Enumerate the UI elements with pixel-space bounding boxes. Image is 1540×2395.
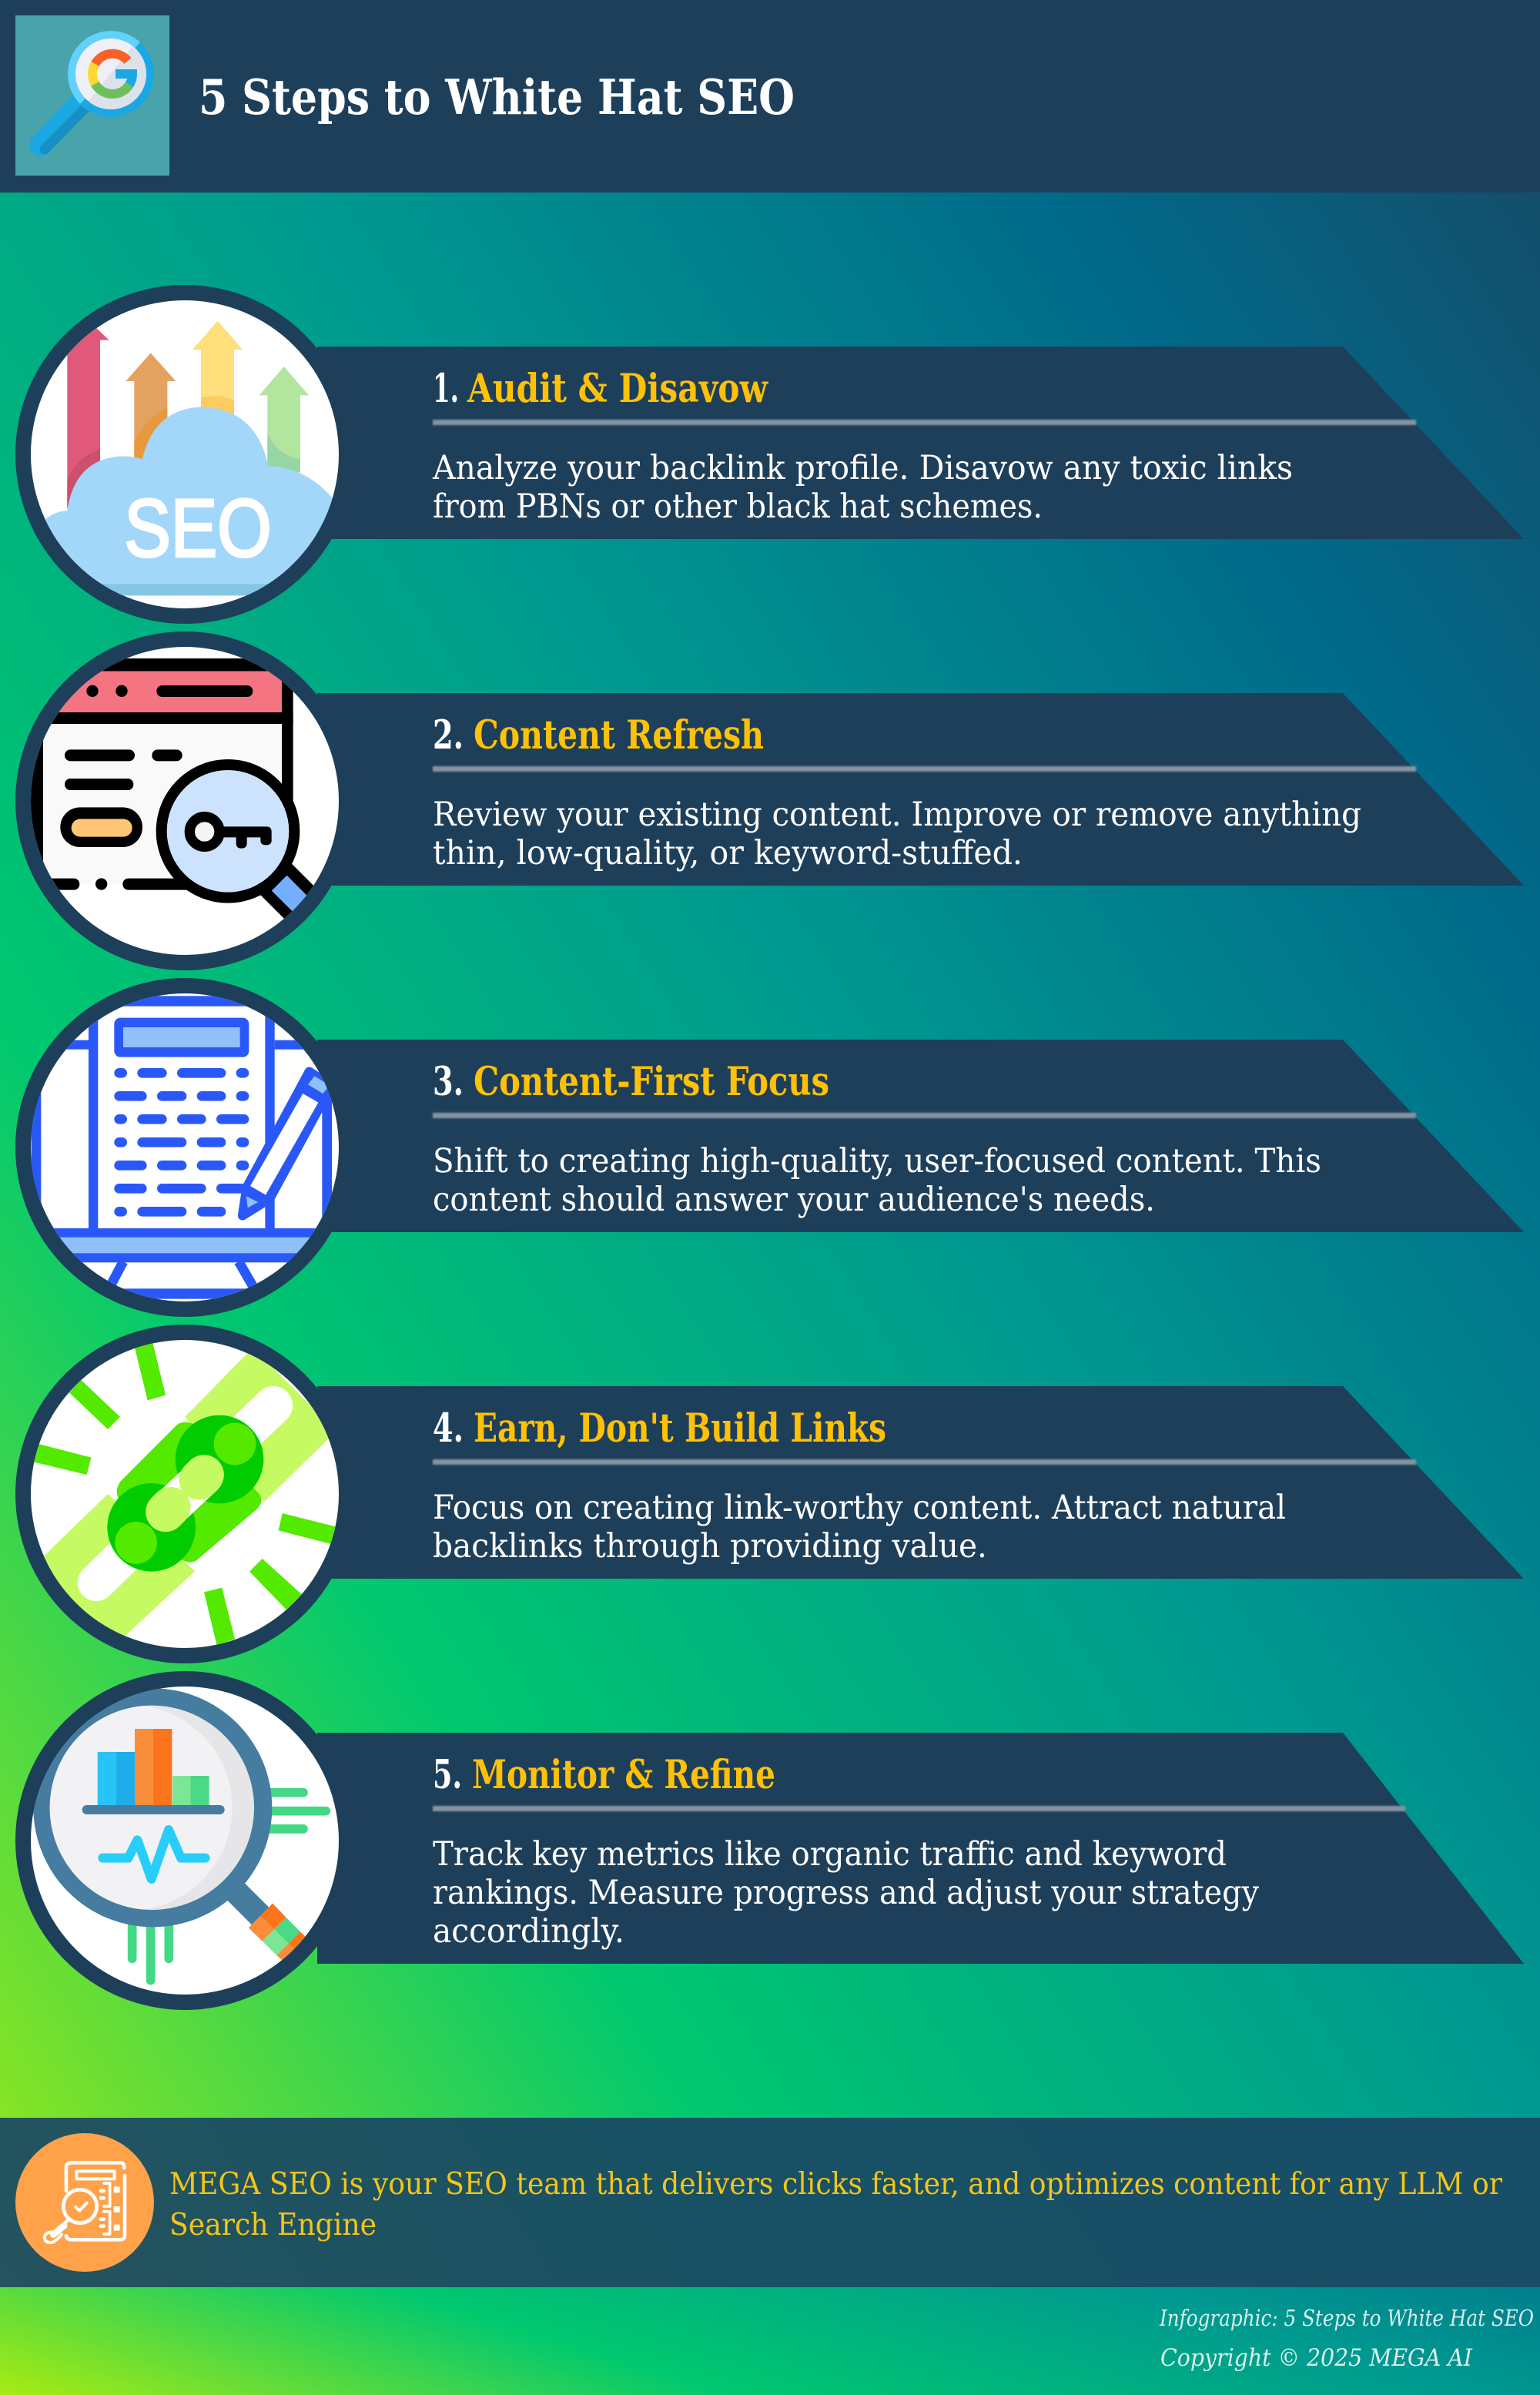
text: step 5 description: accordingly. (433, 1912, 624, 1951)
heading: step 2: Content Refresh (474, 712, 764, 759)
header bar (0, 0, 1540, 193)
step 3 (15, 978, 1524, 1317)
divider (433, 1806, 1405, 1811)
heading: step 3: Content-First Focus (474, 1059, 829, 1105)
text: step 3 description: content should answer your audience's needs. (433, 1181, 1155, 1219)
text: step 3 description: Shift to creating high-quality, user-focused content. This (433, 1142, 1321, 1181)
icon: orange circle with document and magnifier (15, 2133, 154, 2272)
text: step 1 description: from PBNs or other black hat schemes. (433, 487, 1043, 526)
text: step 5 description (433, 1835, 1260, 1951)
divider (433, 1113, 1416, 1118)
panel: step 1 banner (317, 347, 1524, 539)
panel: step 4 banner (317, 1386, 1524, 1579)
text: step 1 description (432, 449, 1293, 526)
step 5 (15, 1671, 1524, 2010)
icon: browser window with key magnifier (15, 631, 354, 970)
text: step 3 description (433, 1142, 1321, 1219)
heading: step 3: 3. (433, 1059, 464, 1105)
text: step 2 description: thin, low-quality, or keyword-stuffed. (433, 834, 1023, 873)
logo: magnifier with G (15, 15, 169, 176)
panel: step 2 banner (317, 693, 1524, 886)
footer gradient band (0, 2287, 1540, 2395)
text: step 4 description: backlinks through providing value. (433, 1527, 987, 1566)
text: step 1 description: Analyze your backlink profile. Disavow any toxic links (432, 449, 1293, 487)
heading: step 4: Earn, Don't Build Links (474, 1405, 886, 1452)
panel: step 5 banner (317, 1733, 1524, 1964)
icon: magnifier over charts (15, 1671, 354, 2010)
icon: document on monitor with pencil (15, 978, 354, 1317)
footer credits (1159, 2305, 1534, 2372)
heading: step 5: 5. (433, 1752, 462, 1798)
step 1 (15, 285, 1524, 624)
text: step 4 description (433, 1489, 1286, 1566)
heading: step 4: 4. (433, 1405, 464, 1452)
heading: step 1: 1. (433, 366, 459, 412)
heading: step 2: 2. (433, 712, 464, 759)
icon: SEO cloud with arrows: SEO (124, 482, 272, 574)
heading: step 1: Audit & Disavow (467, 366, 768, 412)
text: step 5 description: rankings. Measure progress and adjust your strategy (433, 1874, 1260, 1912)
divider (433, 766, 1416, 772)
text: step 4 description: Focus on creating link-worthy content. Attract natural (433, 1489, 1286, 1527)
callout text: Search Engine (169, 2208, 377, 2243)
heading: step 5: Monitor & Refine (472, 1752, 775, 1798)
icon: SEO cloud with arrows (15, 285, 354, 624)
divider (433, 420, 1416, 425)
callout text (169, 2167, 1502, 2243)
text: step 2 description (433, 796, 1361, 873)
step 4 (15, 1325, 1524, 1663)
text: step 2 description: Review your existing content. Improve or remove anything (433, 796, 1361, 834)
panel: step 3 banner (317, 1040, 1524, 1232)
footer credits: Copyright © 2025 MEGA AI (1160, 2344, 1473, 2372)
divider (433, 1459, 1416, 1465)
callout bar: MEGA SEO (0, 2118, 1540, 2287)
icon: green chain link (15, 1325, 354, 1663)
title: 5 Steps to White Hat SEO (199, 69, 795, 126)
step 2 (15, 631, 1524, 970)
text: step 5 description: Track key metrics like organic traffic and keyword (433, 1835, 1227, 1874)
